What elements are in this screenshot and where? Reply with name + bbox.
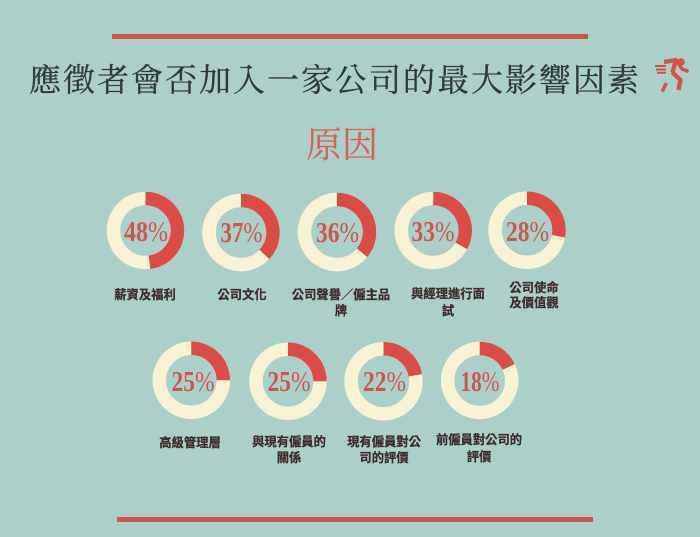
donut: 28% mission and values: 28% (506, 217, 549, 248)
subheading: reasons: 原因 (306, 125, 378, 165)
donut: 33% interview with manager: 試 (442, 303, 455, 318)
donut: 25% senior management: 高級管理層 (159, 435, 221, 450)
icon: running person (655, 58, 688, 92)
bottom red bar (117, 517, 593, 522)
donut: 18% former employee reviews: 評價 (467, 449, 492, 464)
donut: 22% current employee reviews (347, 349, 422, 465)
donut: 48% salary and benefits: 薪資及福利 (114, 287, 176, 302)
donut: 22% current employee reviews: 司的評價 (359, 450, 409, 465)
donut: 33% interview with manager (401, 198, 485, 318)
donut: 18% former employee reviews (436, 348, 522, 464)
donut: 48% salary and benefits (114, 198, 178, 302)
donut: 37% company culture: 37% (220, 218, 262, 249)
donut: 36% company reputation (292, 200, 390, 318)
donut: 18% former employee reviews: 18% (460, 367, 500, 398)
title: 應徵者會否加入一家公司的最大影響因素 (29, 62, 641, 98)
donut: 22% current employee reviews: 22% (363, 367, 406, 398)
donut: 25% relationship with employees: 關係 (277, 450, 301, 465)
donut: 25% relationship with employees: 與現有僱員的 (252, 434, 326, 449)
donut: 25% relationship with employees: 25% (268, 367, 310, 398)
donut: 36% company reputation: 牌 (335, 303, 347, 318)
donut: 48% salary and benefits: 48% (124, 217, 168, 248)
donut: 33% interview with manager: 33% (412, 217, 454, 248)
donut: 28% mission and values (495, 198, 559, 310)
donut: 25% relationship with employees (252, 349, 326, 465)
top red bar (112, 34, 588, 39)
donut: 28% mission and values: 公司使命 (509, 280, 559, 295)
donut: 37% company culture: 公司文化 (217, 287, 267, 302)
donut: 25% senior management: 25% (172, 367, 214, 398)
donut: 25% senior management (159, 348, 223, 450)
donut: 33% interview with manager: 與經理進行面 (411, 286, 485, 301)
donut: 28% mission and values: 及價值觀 (509, 295, 559, 310)
donut: 36% company reputation: 36% (316, 218, 359, 249)
donut: 37% company culture (209, 200, 273, 302)
donut: 18% former employee reviews: 前僱員對公司的 (436, 432, 522, 447)
donut: 36% company reputation: 公司聲譽／僱主品 (292, 287, 390, 302)
donut: 22% current employee reviews: 現有僱員對公 (347, 434, 422, 449)
